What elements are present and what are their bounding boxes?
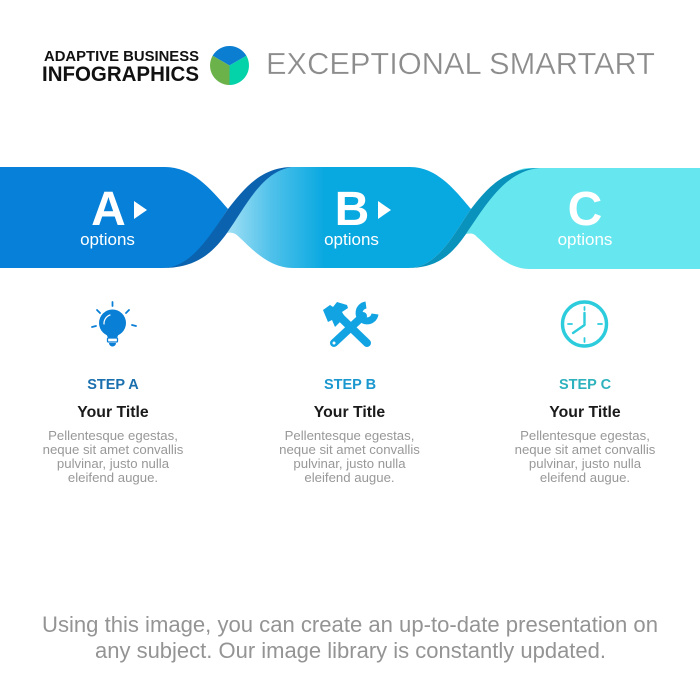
- step A body: neque sit amet convallis: [43, 442, 184, 457]
- step A title: Your Title: [77, 404, 149, 421]
- step A heading: STEP A: [87, 377, 139, 393]
- column: step A: [43, 377, 184, 485]
- step B body: [279, 428, 420, 485]
- step C body: eleifend augue.: [540, 470, 630, 485]
- ribbon fold dark A-B: [163, 167, 293, 268]
- label B: [324, 183, 391, 249]
- logo wordmark: [42, 48, 199, 86]
- footer text: any subject. Our image library is constantly updated.: [95, 638, 606, 663]
- label C: [558, 183, 612, 249]
- logo wordmark: INFOGRAPHICS: [42, 62, 199, 86]
- step B body: Pellentesque egestas,: [285, 428, 414, 443]
- step C heading: STEP C: [559, 377, 612, 393]
- footer text: [42, 612, 658, 663]
- step A body: pulvinar, justo nulla: [57, 456, 170, 471]
- step C body: neque sit amet convallis: [515, 442, 656, 457]
- step B title: Your Title: [314, 404, 385, 421]
- step A body: eleifend augue.: [68, 470, 158, 485]
- step C body: pulvinar, justo nulla: [529, 456, 642, 471]
- step B body: eleifend augue.: [304, 470, 395, 485]
- column: step B: [279, 377, 420, 485]
- column: step C: [515, 377, 656, 485]
- title: EXCEPTIONAL SMARTART: [266, 46, 655, 81]
- ribbon segment C: [466, 168, 700, 269]
- step C body: [515, 428, 656, 485]
- ribbon segment A: [0, 167, 228, 268]
- label B: options: [324, 230, 379, 249]
- step C body: Pellentesque egestas,: [520, 428, 650, 443]
- footer text: Using this image, you can create an up-to-date presentation on: [42, 612, 658, 637]
- label C: options: [558, 230, 612, 249]
- ribbon fold dark B-C: [408, 168, 540, 268]
- step B heading: STEP B: [324, 377, 376, 393]
- step C title: Your Title: [549, 404, 621, 421]
- step A body: [43, 428, 184, 485]
- ribbon: [0, 167, 700, 269]
- label A: A: [91, 183, 126, 236]
- icon: light bulb: [92, 302, 136, 347]
- label A: [80, 183, 147, 249]
- label C: C: [568, 183, 602, 236]
- icon: clock: [562, 302, 606, 346]
- logo wordmark: ADAPTIVE BUSINESS: [44, 48, 199, 65]
- step B body: pulvinar, justo nulla: [293, 456, 406, 471]
- label B: B: [335, 183, 369, 236]
- ribbon segment B: [227, 167, 471, 268]
- step B body: neque sit amet convallis: [279, 442, 420, 457]
- step A body: Pellentesque egestas,: [48, 428, 178, 443]
- logo circle: [210, 46, 249, 85]
- icon: hammer and wrench: [323, 302, 375, 344]
- header logo: [42, 46, 249, 86]
- label A: options: [80, 230, 135, 249]
